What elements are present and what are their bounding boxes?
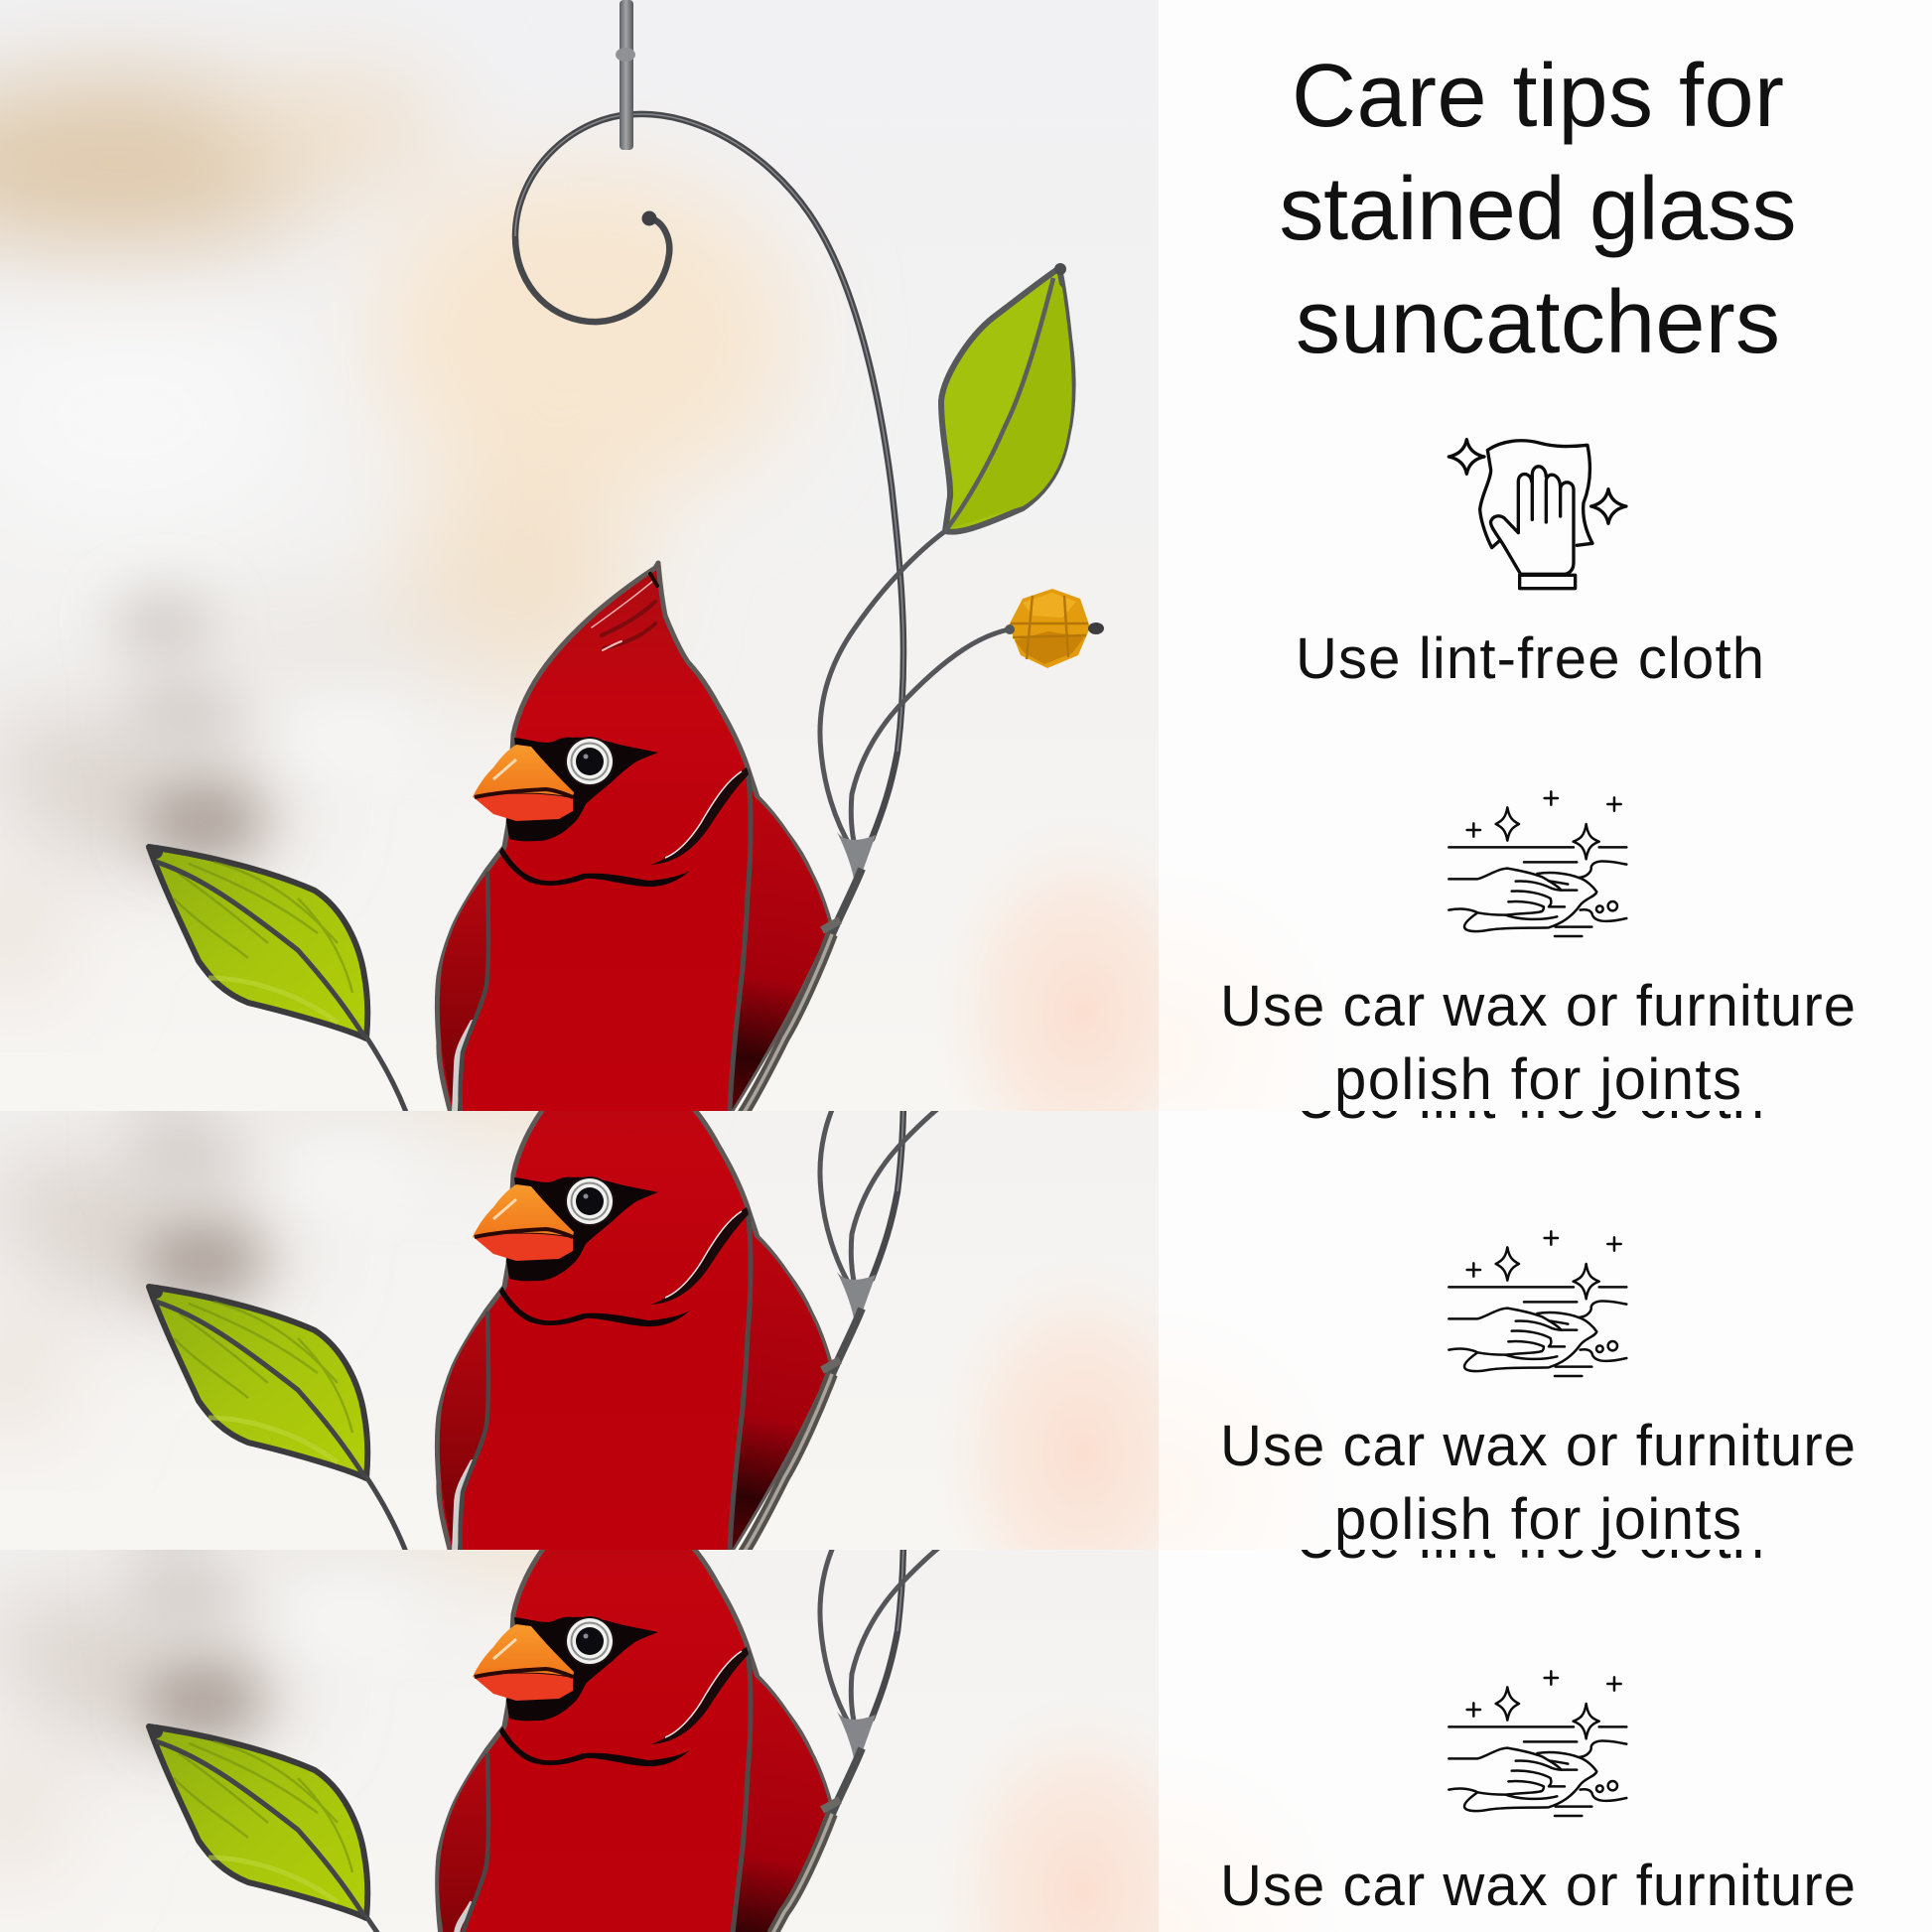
collar line <box>499 847 690 887</box>
icon: hand with cloth and sparkles <box>1449 440 1626 589</box>
panel: third repeated section <box>0 1550 1856 1932</box>
leaf stem <box>820 531 945 849</box>
left green leaf <box>149 845 367 1038</box>
eye <box>565 737 615 786</box>
right text panel background <box>1159 0 1932 1111</box>
upper green leaf <box>941 263 1073 532</box>
cardinal head <box>473 1014 749 1326</box>
crest feathers <box>592 574 657 650</box>
blurred photo background <box>0 509 794 1443</box>
heavy frame wire <box>740 869 862 1119</box>
icon: hand polishing surface <box>1449 791 1626 936</box>
left green leaf <box>149 1725 367 1918</box>
black mask <box>506 738 658 841</box>
bead stem <box>851 629 1009 856</box>
title <box>1279 47 1797 372</box>
left leaf stem <box>365 1035 409 1120</box>
title: suncatchers <box>1296 273 1780 372</box>
soft pink background blob <box>834 794 1159 1111</box>
base background <box>0 1111 1159 1550</box>
left green leaf <box>149 1285 367 1478</box>
icon: hand polishing surface <box>1449 1671 1626 1816</box>
tip text: car wax: polish for joints <box>1334 1047 1741 1111</box>
upper leaf, stem and amber bead <box>820 263 1104 879</box>
neck line <box>650 767 749 865</box>
right text panel background <box>1159 1111 1932 1550</box>
cardinal body with wings and frame wire <box>365 563 862 1120</box>
tip text: car wax: Use car wax or furniture <box>1220 1854 1856 1918</box>
panel: top section with full suncatcher and care tips <box>0 0 1856 1111</box>
soft pink background blob <box>834 1674 1159 1932</box>
wing divider lines <box>455 771 751 1112</box>
stems <box>820 703 1104 1318</box>
stems <box>820 1143 1104 1758</box>
beak <box>473 745 574 821</box>
cardinal body with wings and frame wire <box>365 1003 862 1560</box>
right wing <box>732 794 829 1110</box>
tip text: car wax: Use car wax or furniture <box>1220 974 1856 1038</box>
base background <box>0 0 1159 1111</box>
soft pink background blob <box>834 1234 1159 1550</box>
tip text: car wax <box>1220 974 1856 1112</box>
blurred photo background <box>0 949 794 1882</box>
joint solder <box>837 832 876 879</box>
hanging wire <box>515 880 903 1719</box>
amber glass bead <box>1005 589 1104 668</box>
tip text: car wax: Use car wax or furniture <box>1220 1414 1856 1478</box>
cardinal head <box>473 1453 749 1766</box>
left wing <box>440 874 487 1114</box>
tip text: car wax <box>1220 1414 1856 1552</box>
title: Care tips for <box>1292 47 1784 146</box>
icon: hand polishing surface <box>1449 1231 1626 1376</box>
blurred photo background <box>0 69 794 1003</box>
right text panel background <box>1159 1550 1932 1932</box>
cardinal body with wings and frame wire <box>365 1443 862 1932</box>
hook rod <box>616 0 635 150</box>
base background <box>0 1550 1159 1932</box>
cardinal head <box>473 574 749 887</box>
panel: second repeated section <box>0 1111 1856 1550</box>
title: stained glass <box>1279 160 1797 259</box>
tip text: lint-free cloth: Use lint-free cloth <box>1296 626 1764 691</box>
hanging hook wire and spiral <box>515 0 903 839</box>
bird body <box>437 563 831 1117</box>
hanging wire <box>515 440 903 1279</box>
